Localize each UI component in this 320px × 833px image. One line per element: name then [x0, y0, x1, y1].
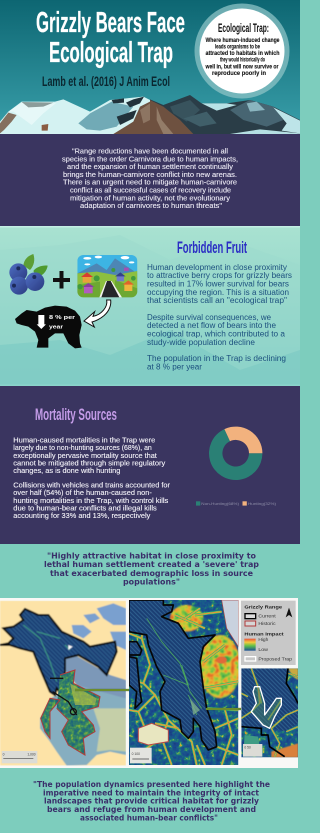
quote: severe trap: that exacerbated demographic loss in source [50, 568, 253, 578]
icon: bear with decline label: year [49, 324, 64, 330]
icon: bear with decline label [15, 306, 82, 348]
callout: ecological trap definition: attracted to habitats in which [206, 50, 280, 57]
quote: closing statement: landscapes that provide critical habitat for grizzly [44, 796, 260, 806]
scale bar: 0 [3, 752, 5, 756]
chart legend: Hunting(32%) [248, 501, 277, 506]
panel: forbidden fruit [0, 226, 300, 387]
quote: severe trap: lethal human settlement created a 'severe' trap [44, 559, 259, 569]
body text: The population in the Trap is declining [147, 354, 286, 363]
heading: Mortality Sources [35, 405, 117, 424]
legend: human impact [244, 631, 293, 662]
body text: changes, as is done with hunting [13, 466, 120, 475]
heading: Forbidden Fruit [177, 238, 247, 257]
title: Ecological Trap [49, 37, 173, 69]
quote: severe trap: "Highly attractive habitat in close proximity to [47, 550, 256, 560]
body text: that scientists call an "ecological trap" [147, 296, 287, 305]
body text: at 8 % per year [147, 362, 202, 372]
quote text: species in the order Carnivora due to human impacts, [62, 154, 238, 163]
legend: human impact: Low [258, 647, 269, 652]
quote text: brings the human-carnivore conflict into new arenas. [63, 170, 237, 179]
mountain range [0, 95, 300, 134]
body text: accounting for 33% and 13%, respectively [13, 511, 151, 520]
body text: Human-caused mortalities in the Trap were [13, 436, 155, 444]
scale bar: 1,000 [27, 752, 36, 756]
quote: closing statement: bears and refuge from human development and [47, 804, 256, 814]
body text: over half (54%) of the human-caused non- [13, 488, 152, 497]
panel: mortality sources [0, 386, 300, 544]
quote text: There is an urgent need to mitigate human-carnivore [63, 178, 237, 187]
icon: plus sign [53, 271, 70, 288]
body text [147, 263, 292, 372]
quote text: conflict as all successful cases of recovery include [70, 186, 231, 194]
legend: north arrow [286, 608, 292, 617]
icon: blueberries [9, 254, 48, 295]
quote text: adaptation of carnivores to human threats" [80, 201, 222, 210]
citation: Lamb et al. (2016) J Anim Ecol [42, 74, 170, 89]
body text [13, 436, 170, 520]
quote text: "Range reductions have been documented in all [72, 146, 228, 156]
body text: largely due to non-hunting sources (68%), an [13, 443, 152, 452]
chart legend [196, 501, 277, 506]
body text: detected a net flow of bears into the [147, 321, 276, 330]
panel: opening quote [0, 134, 300, 227]
body text: cannot be mitigated through simple regulatory [13, 458, 166, 468]
map: proposed trap close-up: 0 50 [244, 746, 251, 750]
legend: human impact: High [258, 637, 269, 642]
legend: grizzly range: Grizzly Range [244, 605, 282, 610]
icon: curved arrow [84, 300, 111, 327]
callout: ecological trap definition: Where human-induced change [206, 37, 280, 44]
title: Grizzly Bears Face [36, 7, 185, 39]
panel: lower section background [0, 544, 300, 833]
body text: Despite survival consequences, we [147, 313, 271, 322]
callout: ecological trap definition: they would historically do [220, 57, 265, 64]
map: proposed trap close-up [241, 668, 298, 757]
quote: closing statement: associated human-bear conflicts" [80, 812, 218, 822]
body text: study-wide population decline [147, 338, 255, 347]
body text: resulted in 17% lower survival for bears [147, 280, 289, 288]
quote: closing statement: "The population dynamics presented here highlight the [33, 779, 270, 789]
connector: mid zoom to close-up [206, 708, 241, 710]
header banner [0, 0, 300, 134]
body text: due to human-bear conflicts and illegal kills [13, 504, 157, 512]
body text: exceptionally pervasive mortality source that [13, 451, 158, 460]
map legend [241, 601, 296, 665]
map: human impact mid zoom: 0 100 [132, 752, 140, 756]
legend: human impact: Human Impact [244, 631, 284, 636]
legend: grizzly range: Current [258, 614, 277, 619]
quote: severe trap [44, 550, 259, 586]
quote text: mitigation of human activity, not the evolutionary [70, 193, 230, 202]
scale bar [3, 752, 36, 759]
map: North America [0, 601, 126, 766]
quote text [62, 146, 238, 210]
map figure [0, 598, 298, 768]
legend: grizzly range: Historic [258, 621, 277, 626]
quote text: and the expansion of human settlement continually [67, 162, 233, 171]
callout: ecological trap definition: leads organisms to be [215, 43, 260, 50]
chart legend: Non-Hunting(68%) [201, 501, 240, 506]
body text: hunting mortalities in the Trap, with control kills [13, 496, 169, 505]
body text: Collisions with vehicles and trains accounted for [13, 480, 170, 490]
body text: occupying the region. This is a situation [147, 288, 289, 297]
quote: closing statement: imperative need to maintain the integrity of intact [43, 787, 259, 797]
donut chart [196, 427, 277, 506]
body text: to attractive berry crops for grizzly bears [147, 271, 292, 280]
connector: map to mid zoom [75, 689, 129, 691]
body text: ecological trap, which contributed to a [147, 330, 286, 338]
body text: Human development in close proximity [147, 263, 287, 272]
icon: village landscape [77, 255, 137, 297]
legend: grizzly range [244, 605, 282, 626]
title [36, 7, 185, 69]
icon: bear with decline label: 8 % per [49, 315, 76, 321]
map: human impact mid zoom [129, 600, 241, 765]
callout: ecological trap definition: reproduce poorly in [212, 70, 266, 77]
callout: ecological trap definition [194, 4, 290, 98]
legend: human impact: Proposed Trap [258, 657, 293, 662]
callout: ecological trap definition: well in, but will now survive or [205, 63, 279, 70]
quote: closing statement [33, 779, 270, 822]
quote: severe trap: populations" [123, 576, 180, 586]
